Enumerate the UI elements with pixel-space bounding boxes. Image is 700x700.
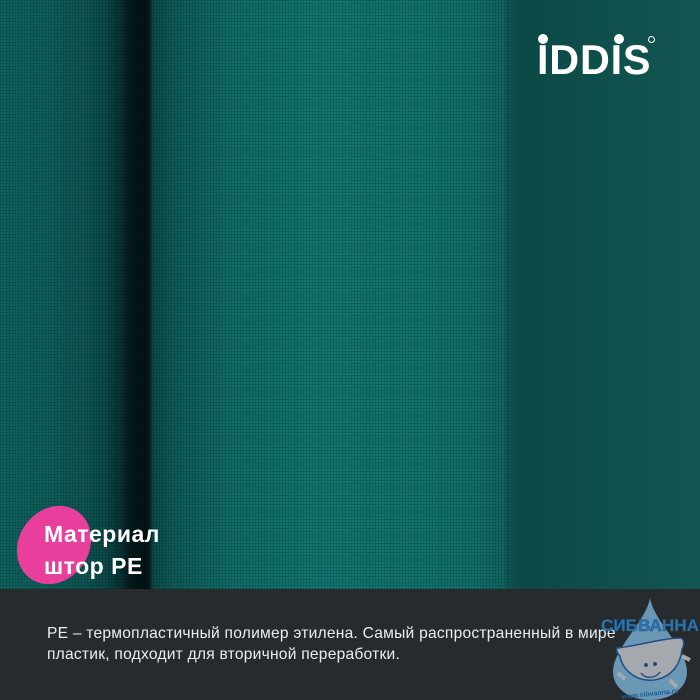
watermark: Сибванна bathtub drop: СИБВАННА	[601, 616, 699, 635]
watermark: Сибванна bathtub drop	[601, 598, 699, 700]
description text	[47, 625, 616, 663]
title: Материал	[44, 521, 160, 547]
fabric weave texture	[0, 0, 510, 589]
icon: pink blob behind title	[16, 506, 92, 584]
title	[44, 521, 160, 579]
logo: IDDIS: IDDIS	[537, 36, 651, 83]
description text: пластик, подходит для вторичной переработки.	[47, 646, 400, 663]
title: штор PE	[44, 553, 143, 579]
panel: description bar	[0, 589, 700, 700]
description text: PE – термопластичный полимер этилена. Самый распространенный в мире	[47, 625, 616, 642]
